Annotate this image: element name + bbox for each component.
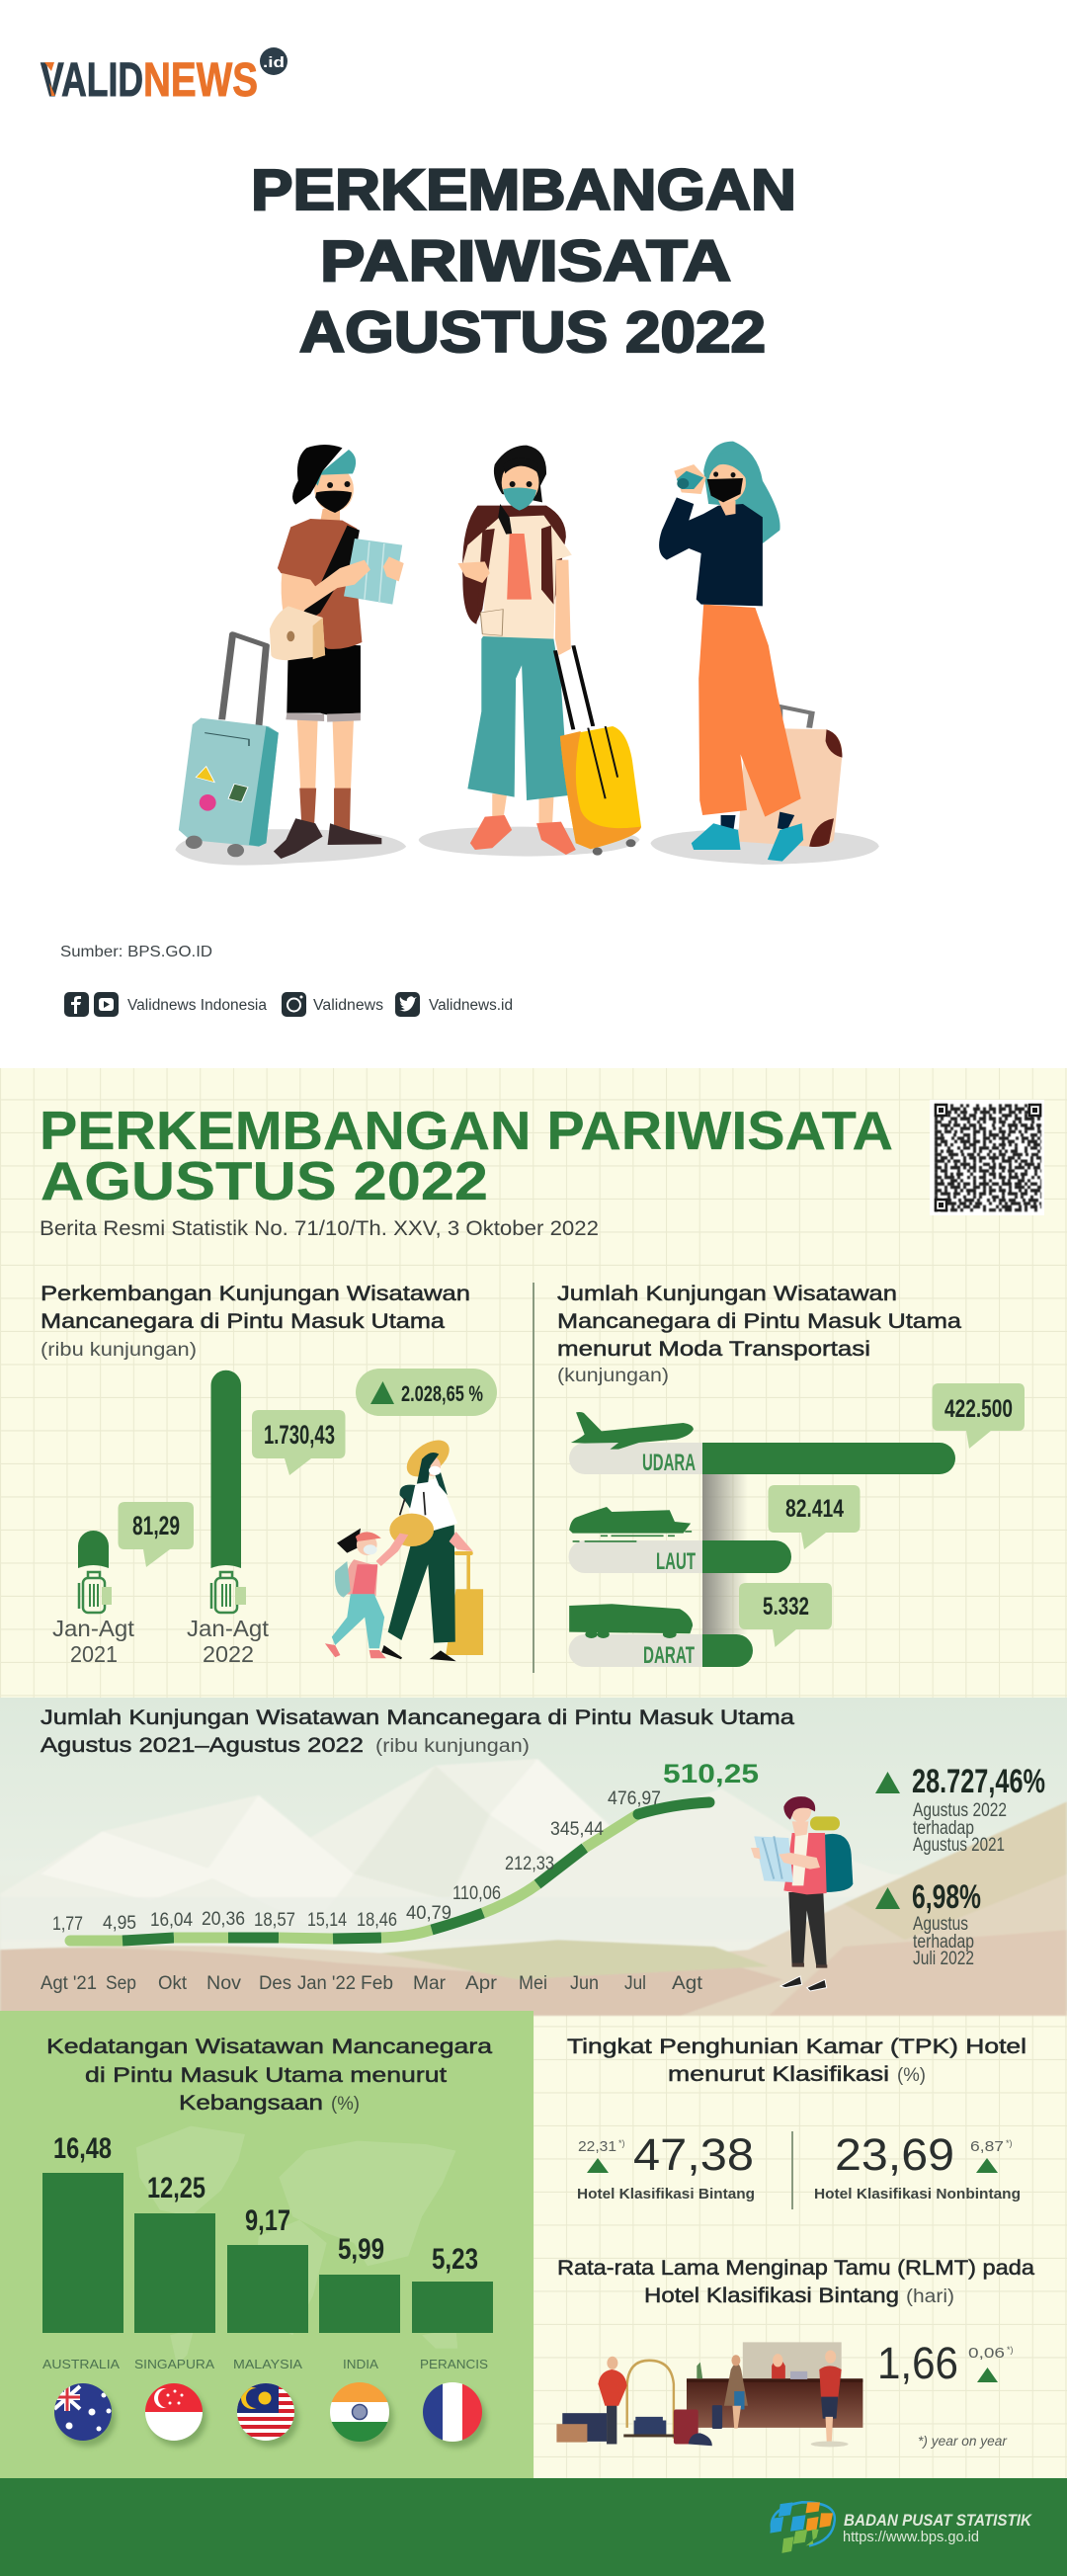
- panel background: [0, 2011, 534, 2478]
- heading: menurut Klasifikasi: [668, 2063, 889, 2086]
- value labels: 476,97: [608, 1788, 661, 1809]
- stat: non-star hotels: [814, 2129, 1021, 2202]
- month axis labels: Jul: [624, 1973, 646, 1994]
- flag: India: [330, 2382, 389, 2442]
- bar: Perancis: 5,23: [432, 2243, 478, 2276]
- icon: ship: [569, 1507, 692, 1541]
- logo: Validnews: VALID: [41, 54, 143, 107]
- callout: 422.500: [933, 1383, 1025, 1449]
- heading: Mancanegara di Pintu Masuk Utama: [41, 1310, 445, 1333]
- stat: non-star hotels: Hotel Klasifikasi Nonbintang: [814, 2187, 1021, 2202]
- bar: Australia: 16,48: [53, 2132, 112, 2165]
- month axis labels: Feb: [361, 1973, 393, 1994]
- panel: monthly visits with mountain scene: [0, 1698, 1067, 2016]
- panel: arrivals by nationality: [0, 2011, 534, 2478]
- ground shadows: [175, 827, 879, 866]
- figure: woman with camera and orange pants: [659, 442, 842, 862]
- stat: month on month: Juli 2022: [913, 1949, 974, 1969]
- logo: BPS: [770, 2502, 835, 2553]
- bar: LAUT: LAUT: [656, 1548, 696, 1575]
- heading: length of stay: Rata-rata Lama Menginap Tamu (RLMT) pada: [557, 2257, 1034, 2280]
- heading: Kebangsaan: [179, 2092, 323, 2115]
- callout: 81,29: 81,29: [132, 1511, 180, 1540]
- stat: length of stay: 0,06: [968, 2345, 1005, 2362]
- month axis labels: Agt: [672, 1973, 703, 1994]
- handle: Validnews.id: Validnews.id: [429, 997, 513, 1014]
- icon: youtube: [94, 992, 119, 1017]
- BPS main title: PERKEMBANGAN PARIWISATA: [40, 1100, 893, 1161]
- logo: Validnews: .id: [263, 54, 285, 71]
- month axis labels: Okt: [158, 1973, 188, 1994]
- country names: MALAYSIA: [233, 2357, 302, 2371]
- bar: Australia: [42, 2132, 123, 2333]
- country names: SINGAPURA: [134, 2357, 214, 2371]
- stat: length of stay: *): [1007, 2345, 1014, 2355]
- label: Jan-Agt 2022: [187, 1616, 270, 1667]
- stat: month on month: Agustus: [913, 1914, 968, 1935]
- heading: (%): [331, 2094, 360, 2115]
- month axis labels: [41, 1973, 703, 1994]
- bar: DARAT: DARAT: [643, 1642, 695, 1669]
- panel: foreign visits Jan-Aug: [41, 1283, 497, 1667]
- bar: Malaysia: [227, 2204, 308, 2333]
- callout: 82.414: [769, 1485, 860, 1549]
- stat: star hotels: 47,38: [633, 2129, 754, 2180]
- stat: month on month: [875, 1878, 981, 1969]
- label: Jan-Agt 2022: 2022: [203, 1641, 254, 1667]
- label: Jan-Agt 2021: 2021: [70, 1641, 118, 1667]
- bar shadows: [702, 1474, 748, 1634]
- figure: woman with backpack and yellow suitcase: [457, 446, 641, 856]
- icon: plane, ship and bus: [569, 1412, 694, 1638]
- footer band: [0, 2478, 1067, 2576]
- bar: India: [319, 2233, 400, 2333]
- value labels: 15,14: [307, 1910, 347, 1931]
- stat: star hotels: [577, 2129, 755, 2202]
- value labels: 4,95: [103, 1913, 136, 1934]
- divider: between top panels: [533, 1283, 534, 1673]
- panel: visits by transport mode: [557, 1283, 1025, 1669]
- heading: Agustus 2021–Agustus 2022: [41, 1734, 364, 1757]
- agency name: BADAN PUSAT STATISTIK: [844, 2512, 1032, 2530]
- month axis labels: Agt '21: [41, 1973, 97, 1994]
- icon: instagram: [282, 992, 306, 1017]
- value labels: 18,46: [357, 1910, 397, 1931]
- illustration: three masked travellers: [175, 442, 879, 866]
- icon: twitter: [395, 992, 420, 1017]
- logo: Validnews: NEWS: [143, 54, 258, 107]
- flag: Malaysia: [237, 2383, 294, 2441]
- value labels: 40,79: [406, 1903, 451, 1924]
- callout: 82.414: 82.414: [785, 1495, 844, 1523]
- stat: month on month: terhadap: [913, 1932, 974, 1953]
- heading: [41, 1706, 794, 1757]
- bar: Malaysia: 9,17: [245, 2204, 290, 2237]
- logo: Validnews: [41, 47, 287, 107]
- footnote: *) year on year: [918, 2433, 1008, 2449]
- heading: menurut Moda Transportasi: [557, 1338, 870, 1361]
- bar: UDARA: UDARA: [642, 1450, 696, 1476]
- bar: India: 5,99: [338, 2233, 384, 2266]
- line chart: [70, 1802, 709, 1941]
- unit: (ribu kunjungan): [41, 1340, 197, 1361]
- heading: length of stay: (hari): [906, 2286, 954, 2307]
- label: Jan-Agt 2021: Jan-Agt: [52, 1616, 135, 1641]
- bar: LAUT: [569, 1540, 791, 1575]
- figure: man with map: [179, 445, 404, 859]
- title: PARIWISATA: [320, 229, 731, 293]
- bar: Singapura: [134, 2172, 215, 2333]
- stat: length of stay: [877, 2338, 1014, 2388]
- month axis labels: Sep: [106, 1973, 136, 1994]
- agency url: https://www.bps.go.id: [843, 2529, 979, 2545]
- handle: Validnews: Validnews: [313, 997, 383, 1014]
- value labels: 510,25: [663, 1759, 759, 1788]
- month axis labels: Des: [259, 1973, 291, 1994]
- heading: Jumlah Kunjungan Wisatawan Mancanegara di Pintu Masuk Utama: [41, 1706, 794, 1729]
- callout: 81,29: [119, 1502, 194, 1567]
- illustration: mother and child with suitcase: [325, 1433, 483, 1660]
- QR code: [930, 1100, 1044, 1215]
- month axis labels: Nov: [206, 1973, 242, 1994]
- stat: non-star hotels: *): [1006, 2138, 1013, 2148]
- heading: length of stay: Hotel Klasifikasi Bintang: [644, 2285, 899, 2307]
- value labels: 16,04: [150, 1910, 193, 1931]
- callout: 1.730,43: [252, 1410, 346, 1475]
- value labels: 18,57: [254, 1910, 295, 1931]
- heading: [46, 2036, 492, 2115]
- icon: bus: [569, 1604, 693, 1638]
- bar chart: [42, 2132, 493, 2333]
- stat: month on month: 6,98%: [912, 1878, 981, 1916]
- stat: star hotels: Hotel Klasifikasi Bintang: [577, 2187, 755, 2202]
- panel: hotel room occupancy: [556, 2036, 1034, 2449]
- value labels: 20,36: [202, 1909, 245, 1930]
- bar: 2022: [211, 1371, 241, 1568]
- country names: INDIA: [343, 2357, 378, 2371]
- country names: [42, 2357, 488, 2371]
- country names: AUSTRALIA: [42, 2357, 120, 2371]
- world map backdrop: [136, 2126, 457, 2365]
- stat: length of stay: 1,66: [877, 2338, 958, 2388]
- icon: luggage 2021: [79, 1572, 112, 1613]
- label: Jan-Agt 2022: Jan-Agt: [187, 1616, 270, 1641]
- callout: growth pill: [356, 1369, 497, 1416]
- month axis labels: Jun: [570, 1973, 599, 1994]
- heading: Mancanegara di Pintu Masuk Utama: [557, 1310, 961, 1333]
- heading: length of stay: [557, 2257, 1034, 2307]
- month axis labels: Mei: [519, 1973, 547, 1994]
- flag shadows: [58, 2388, 486, 2448]
- scene: mountain background: [0, 1698, 1067, 2016]
- subtitle: Berita Resmi Statistik No. 71/10/Th. XXV, 3 Oktober 2022: [40, 1217, 599, 1240]
- month axis labels: Apr: [465, 1973, 498, 1994]
- callout: 422.500: 422.500: [944, 1395, 1013, 1423]
- title: AGUSTUS 2022: [299, 300, 766, 365]
- label: Jan-Agt 2021: [52, 1616, 135, 1667]
- heading: di Pintu Masuk Utama menurut: [85, 2064, 447, 2087]
- icon: facebook: [64, 992, 89, 1017]
- month axis labels: Jan '22: [297, 1973, 356, 1994]
- stat: year on year: terhadap: [913, 1818, 974, 1839]
- icon: luggage 2022: [211, 1572, 246, 1613]
- stat: year on year: [875, 1763, 1045, 1856]
- callout: 1.730,43: 1.730,43: [264, 1420, 335, 1450]
- heading: [41, 1283, 470, 1333]
- bar: 2021: [78, 1531, 109, 1568]
- flag: Australia: [53, 2382, 113, 2442]
- value labels: 212,33: [505, 1854, 554, 1874]
- callout: growth pill: 2.028,65 %: [401, 1381, 483, 1406]
- bar: DARAT: [569, 1634, 753, 1669]
- divider: hotel classes: [791, 2131, 793, 2209]
- flag: Perancis: [423, 2382, 482, 2442]
- callout: 5.332: 5.332: [763, 1593, 809, 1620]
- flag: Singapura: [145, 2383, 203, 2441]
- illustration: backpacker with map: [751, 1796, 853, 1991]
- source note: Sumber: BPS.GO.ID: [60, 944, 212, 960]
- panel: BPS background: [0, 1068, 1067, 2481]
- BPS main title: AGUSTUS 2022: [41, 1150, 488, 1211]
- heading: Tingkat Penghunian Kamar (TPK) Hotel: [567, 2036, 1026, 2058]
- month axis labels: Mar: [413, 1973, 447, 1994]
- heading: Jumlah Kunjungan Wisatawan: [557, 1283, 897, 1305]
- heading: Kedatangan Wisatawan Mancanegara: [46, 2036, 492, 2058]
- stat: star hotels: *): [618, 2138, 625, 2148]
- bar: UDARA: [569, 1443, 955, 1476]
- BPS main title: [40, 1100, 893, 1211]
- heading: [567, 2036, 1026, 2086]
- bar: Perancis: [412, 2243, 493, 2333]
- unit: (ribu kunjungan): [375, 1736, 530, 1757]
- stat: star hotels: 22,31: [578, 2138, 616, 2155]
- stat: year on year: Agustus 2022: [913, 1800, 1007, 1821]
- value labels: 345,44: [550, 1819, 604, 1840]
- heading: [557, 1283, 961, 1361]
- illustration: hotel lobby: [556, 2342, 862, 2447]
- country names: PERANCIS: [420, 2357, 488, 2371]
- heading: Perkembangan Kunjungan Wisatawan: [41, 1283, 470, 1305]
- bar: Singapura: 12,25: [147, 2172, 205, 2204]
- stat: non-star hotels: 23,69: [835, 2129, 954, 2180]
- unit: (kunjungan): [557, 1366, 669, 1386]
- stat: non-star hotels: 6,87: [970, 2138, 1004, 2155]
- heading: (%): [897, 2065, 926, 2086]
- handle: Validnews Indonesia: Validnews Indonesia: [127, 997, 267, 1014]
- social media row: [64, 992, 513, 1017]
- callout: 5.332: [739, 1583, 832, 1647]
- title: [251, 158, 796, 365]
- stat: year on year: Agustus 2021: [913, 1835, 1005, 1856]
- icon: plane: [571, 1412, 694, 1450]
- value labels: [52, 1759, 759, 1935]
- value labels: 1,77: [52, 1914, 83, 1935]
- title: PERKEMBANGAN: [251, 158, 796, 222]
- value labels: 110,06: [452, 1883, 501, 1904]
